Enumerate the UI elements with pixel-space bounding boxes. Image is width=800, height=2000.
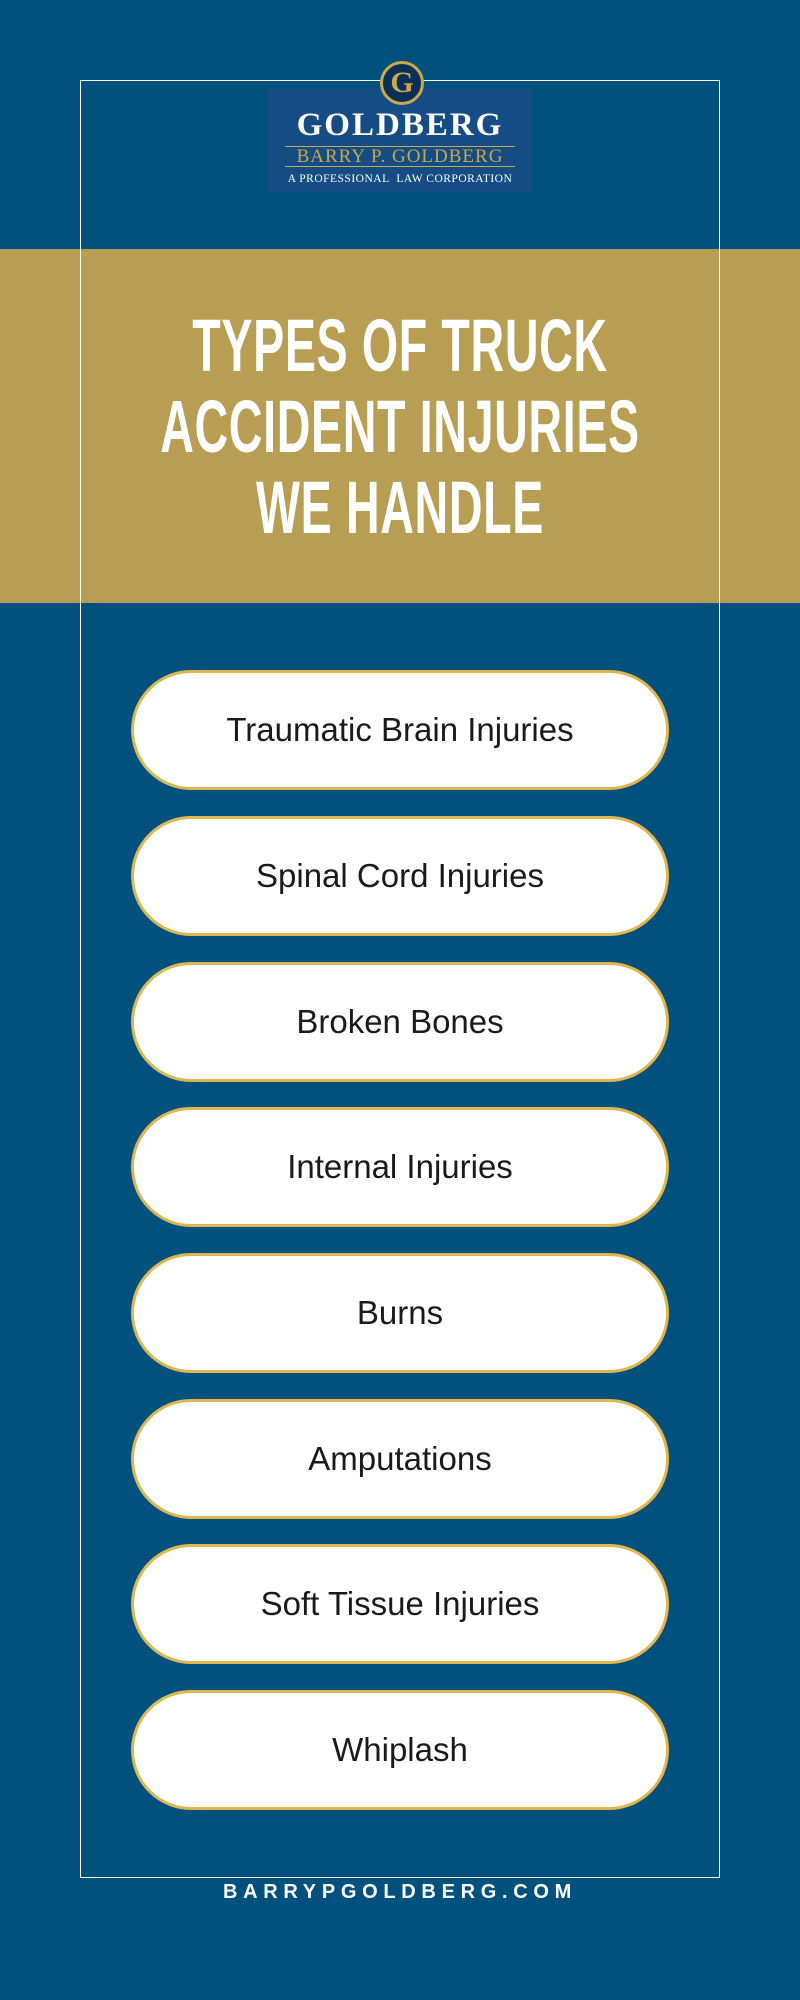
footer url: BARRYPGOLDBERG.COM	[223, 1881, 577, 1903]
pill: 4	[131, 1107, 669, 1227]
pill: 6: Amputations	[308, 1440, 492, 1477]
pill: 4: Internal Injuries	[287, 1148, 513, 1185]
pill: 3	[131, 962, 669, 1082]
pill: 8	[131, 1690, 669, 1810]
pill: 2: Spinal Cord Injuries	[256, 857, 544, 894]
icon: G medallion	[380, 61, 424, 105]
frame border	[80, 80, 720, 1878]
pill: 6	[131, 1399, 669, 1519]
title: ACCIDENT INJURIES	[160, 385, 640, 468]
title: TYPES OF TRUCK	[192, 304, 608, 387]
pill: 5	[131, 1253, 669, 1373]
pill: 3: Broken Bones	[296, 1003, 504, 1040]
title: WE HANDLE	[256, 466, 544, 549]
pill: 1: Traumatic Brain Injuries	[226, 711, 574, 748]
title band	[0, 249, 800, 603]
title	[160, 304, 640, 549]
pill: 8: Whiplash	[332, 1731, 468, 1768]
pill: 7: Soft Tissue Injuries	[261, 1585, 539, 1622]
pill: 2	[131, 816, 669, 936]
pill: 1	[131, 670, 669, 790]
pill: 7	[131, 1544, 669, 1664]
icon: G medallion: G	[390, 66, 414, 99]
logo	[268, 61, 532, 192]
logo: A PROFESSIONAL LAW CORPORATION	[288, 173, 512, 185]
pill: 5: Burns	[357, 1294, 443, 1331]
logo: GOLDBERG	[297, 107, 503, 143]
logo: BARRY P. GOLDBERG	[297, 146, 503, 167]
